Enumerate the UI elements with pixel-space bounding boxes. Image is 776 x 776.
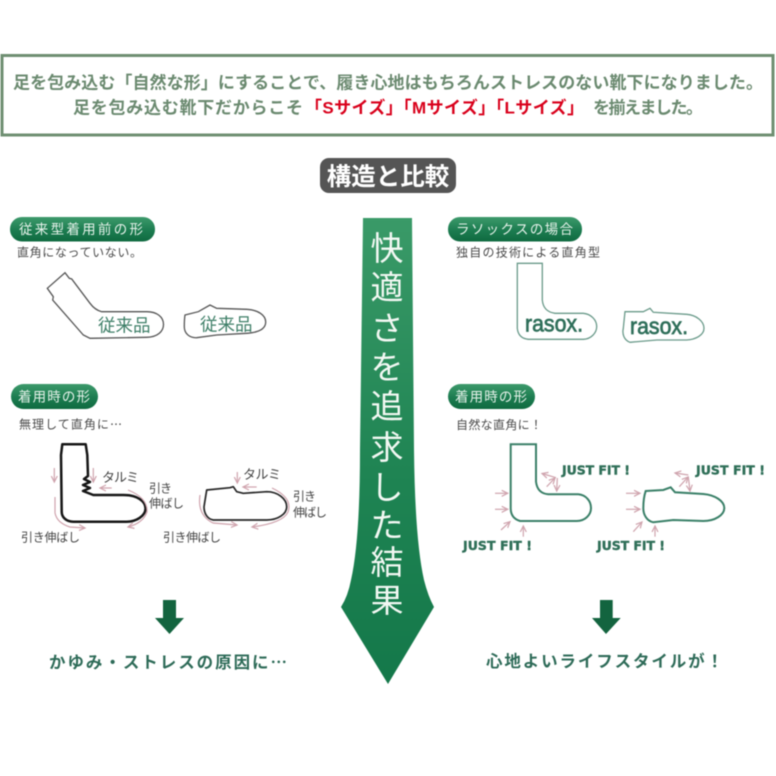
banner line 2: を揃えました。 <box>593 98 703 118</box>
icon: worn short sock with slack: 引き伸ばし <box>163 530 221 544</box>
heading: structure and comparison <box>320 158 456 193</box>
pill heading <box>11 384 98 409</box>
arrow vertical text <box>370 230 404 619</box>
strain arrows <box>54 468 147 528</box>
arrow vertical text: た <box>370 507 404 544</box>
arrow vertical text: 適 <box>370 269 404 306</box>
banner line 2: 足を包み込む靴下だからこそ <box>73 98 303 118</box>
icon: rasox sock outline <box>517 263 597 339</box>
arrow vertical text: 結 <box>370 544 404 581</box>
central arrow <box>341 218 434 684</box>
icon: worn sock with slack: 伸ばし <box>149 496 184 510</box>
banner: intro message <box>2 56 773 135</box>
icon: worn sock with slack <box>21 444 184 544</box>
arrow vertical text: し <box>370 469 404 506</box>
arrow vertical text: 快 <box>370 230 404 267</box>
pill heading: ラソックスの場合 <box>456 222 574 237</box>
subtext: 自然な直角に！ <box>456 417 542 432</box>
pill heading <box>10 217 155 242</box>
pill heading: 着用時の形 <box>455 388 528 404</box>
icon: rasox short sock outline <box>623 308 704 342</box>
banner line 2: 「Sサイズ」「Mサイズ」「Lサイズ」 <box>305 98 584 118</box>
result text: left: かゆみ・ストレスの原因に… <box>49 649 287 673</box>
banner line 1: 足を包み込む「自然な形」にすることで、履き心地はもちろんストレスのない靴下になりました。 <box>13 72 763 92</box>
banner line 2 <box>73 98 703 118</box>
icon: worn rasox sock: JUST FIT ! <box>561 462 630 478</box>
panel: conventional sock before wearing <box>10 217 266 338</box>
arrow vertical text: を <box>370 349 404 386</box>
arrow vertical text: 求 <box>370 429 404 466</box>
icon: worn rasox short sock: JUST FIT ! <box>596 538 665 553</box>
icon: conventional sock outline: 従来品 <box>98 316 150 336</box>
result text: right: 心地よいライフスタイルが！ <box>486 648 723 672</box>
icon: conventional sock outline <box>47 273 163 338</box>
pill heading: 着用時の形 <box>18 388 90 404</box>
icon: worn short sock with slack <box>163 467 327 544</box>
icon: worn rasox sock: JUST FIT ! <box>462 538 532 553</box>
arrow vertical text: 果 <box>370 582 404 619</box>
icon: worn rasox sock <box>462 444 630 553</box>
subtext: 無理して直角に… <box>19 416 122 432</box>
fit arrows <box>495 474 557 537</box>
arrow vertical text: 追 <box>370 388 404 425</box>
pill heading <box>448 384 535 409</box>
panel: conventional sock when worn <box>11 384 327 544</box>
arrow: left result <box>155 600 184 634</box>
heading: structure and comparison: 構造と比較 <box>327 163 450 191</box>
icon: worn short sock with slack: タルミ <box>243 467 281 482</box>
subtext: 直角になっていない。 <box>17 244 142 260</box>
pill heading <box>448 217 582 242</box>
icon: worn rasox short sock: JUST FIT ! <box>695 462 765 478</box>
icon: worn sock with slack: タルミ <box>102 470 139 485</box>
subtext: 独自の技術による直角型 <box>456 244 600 260</box>
icon: rasox short sock outline: rasox. <box>630 313 688 339</box>
icon: worn short sock with slack: 引き <box>293 490 316 504</box>
icon: worn short sock with slack: 伸ばし <box>293 506 327 520</box>
arrow vertical text: さ <box>370 310 404 347</box>
icon: worn sock with slack: 引き <box>149 482 172 496</box>
strain arrows <box>200 472 289 527</box>
fit arrows <box>626 473 690 537</box>
icon: worn sock with slack: 引き伸ばし <box>21 530 80 544</box>
icon: conventional short sock outline <box>184 305 266 338</box>
pill heading: 従来型着用前の形 <box>19 221 144 237</box>
arrow: right result <box>592 600 621 634</box>
panel: rasox sock before wearing <box>448 217 704 342</box>
icon: conventional short sock outline: 従来品 <box>200 314 252 334</box>
icon: rasox sock outline: rasox. <box>525 310 583 336</box>
icon: worn rasox short sock <box>596 462 765 553</box>
panel: rasox sock when worn <box>448 384 765 553</box>
